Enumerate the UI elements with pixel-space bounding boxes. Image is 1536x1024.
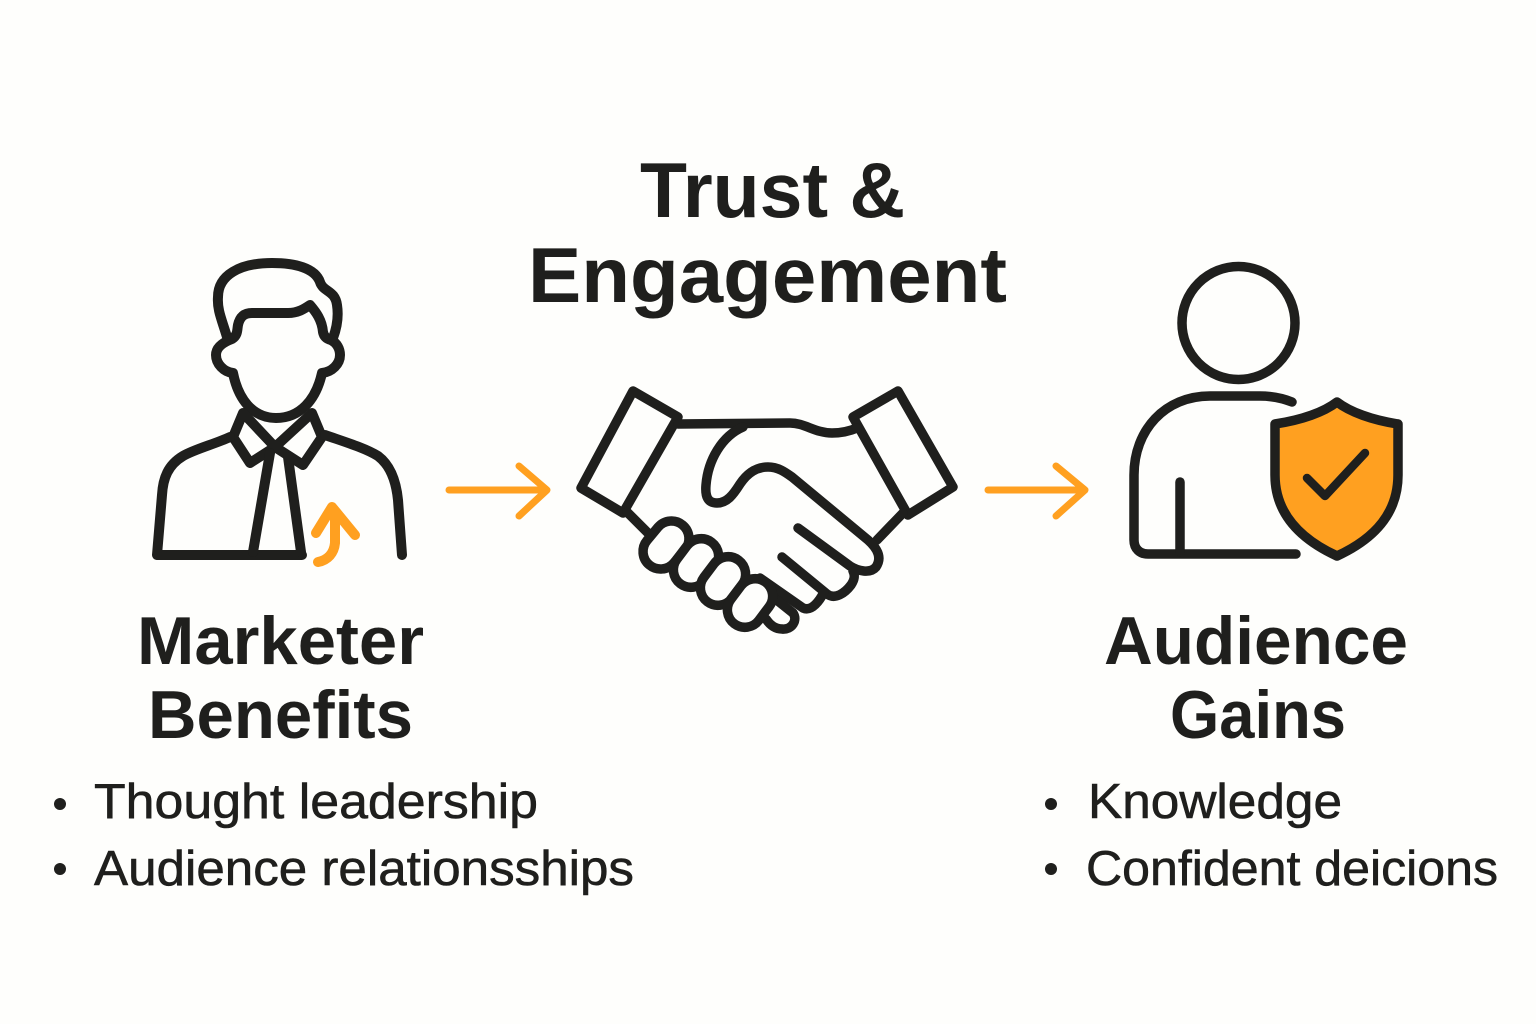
arrow: marketer to handshake <box>449 466 547 516</box>
icon: shield with check mark <box>1275 402 1398 556</box>
arrow: handshake to audience <box>988 466 1085 516</box>
icon: marketer in shirt and tie <box>157 263 402 562</box>
list: audience gains: Confident deicions <box>1086 842 1498 896</box>
list: audience gains: Knowledge <box>1088 775 1342 829</box>
list: marketer benefits: Thought leadership <box>94 775 538 829</box>
heading: audience gains <box>1104 603 1408 753</box>
heading: audience gains: Gains <box>1170 677 1346 753</box>
icon: orange up arrow <box>316 507 355 562</box>
icon: person <box>1134 266 1296 554</box>
icon: audience member with shield <box>1134 266 1398 556</box>
heading: marketer benefits: Benefits <box>148 677 413 753</box>
title: Trust & <box>640 146 905 234</box>
list: marketer benefits: Audience relationsships <box>94 842 634 896</box>
icon: handshake <box>581 391 953 634</box>
title: Engagement <box>528 231 1007 319</box>
list: audience gains <box>1045 775 1498 896</box>
list: marketer benefits <box>54 775 634 896</box>
heading: marketer benefits <box>137 603 424 753</box>
heading: audience gains: Audience <box>1104 603 1408 679</box>
title <box>528 146 1007 319</box>
heading: marketer benefits: Marketer <box>137 603 424 679</box>
